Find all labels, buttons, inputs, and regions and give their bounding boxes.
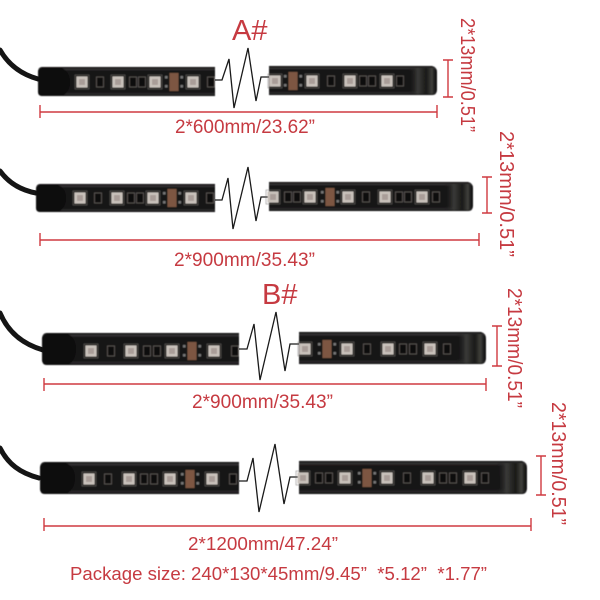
length label: 2*900mm/35.43” (174, 249, 315, 271)
break squiggle (239, 312, 299, 380)
length dimension line (44, 378, 486, 391)
group: strip A 600mm (0, 18, 479, 138)
length label: 2*600mm/23.62” (175, 116, 315, 138)
strip left segment (42, 333, 239, 365)
height label: 2*13mm/0.51” (495, 131, 518, 257)
cable (0, 448, 39, 478)
height bracket (536, 456, 546, 495)
group: strip A 900mm (0, 131, 518, 271)
cable (0, 50, 38, 79)
label: B#: B# (262, 279, 297, 311)
strip left segment (40, 462, 239, 494)
group: strip B 1200mm (0, 402, 570, 554)
length label: 2*900mm/35.43” (192, 391, 333, 413)
strip right segment (296, 461, 527, 494)
height label: 2*13mm/0.51” (503, 288, 526, 408)
height bracket (482, 177, 492, 213)
cable (0, 171, 36, 193)
height bracket (492, 326, 502, 366)
length dimension line (44, 518, 531, 531)
length dimension line (40, 105, 437, 118)
break squiggle (239, 444, 299, 512)
strip left segment (36, 184, 215, 212)
break squiggle (215, 167, 269, 229)
height bracket (443, 60, 453, 97)
strip right segment (298, 332, 486, 364)
length label: 2*1200mm/47.24” (188, 533, 338, 554)
group: strip B 900mm (0, 288, 526, 413)
strip right segment (266, 182, 473, 211)
height label: 2*13mm/0.51” (456, 18, 479, 132)
cable (0, 313, 43, 350)
length dimension line (40, 233, 479, 246)
strip right segment (268, 66, 437, 95)
label: A#: A# (232, 15, 267, 47)
height label: 2*13mm/0.51” (547, 402, 570, 525)
package size note: Package size: 240*130*45mm/9.45” *5.12” *1.77” (70, 563, 487, 584)
break squiggle (215, 48, 269, 108)
strip left segment (38, 67, 215, 96)
